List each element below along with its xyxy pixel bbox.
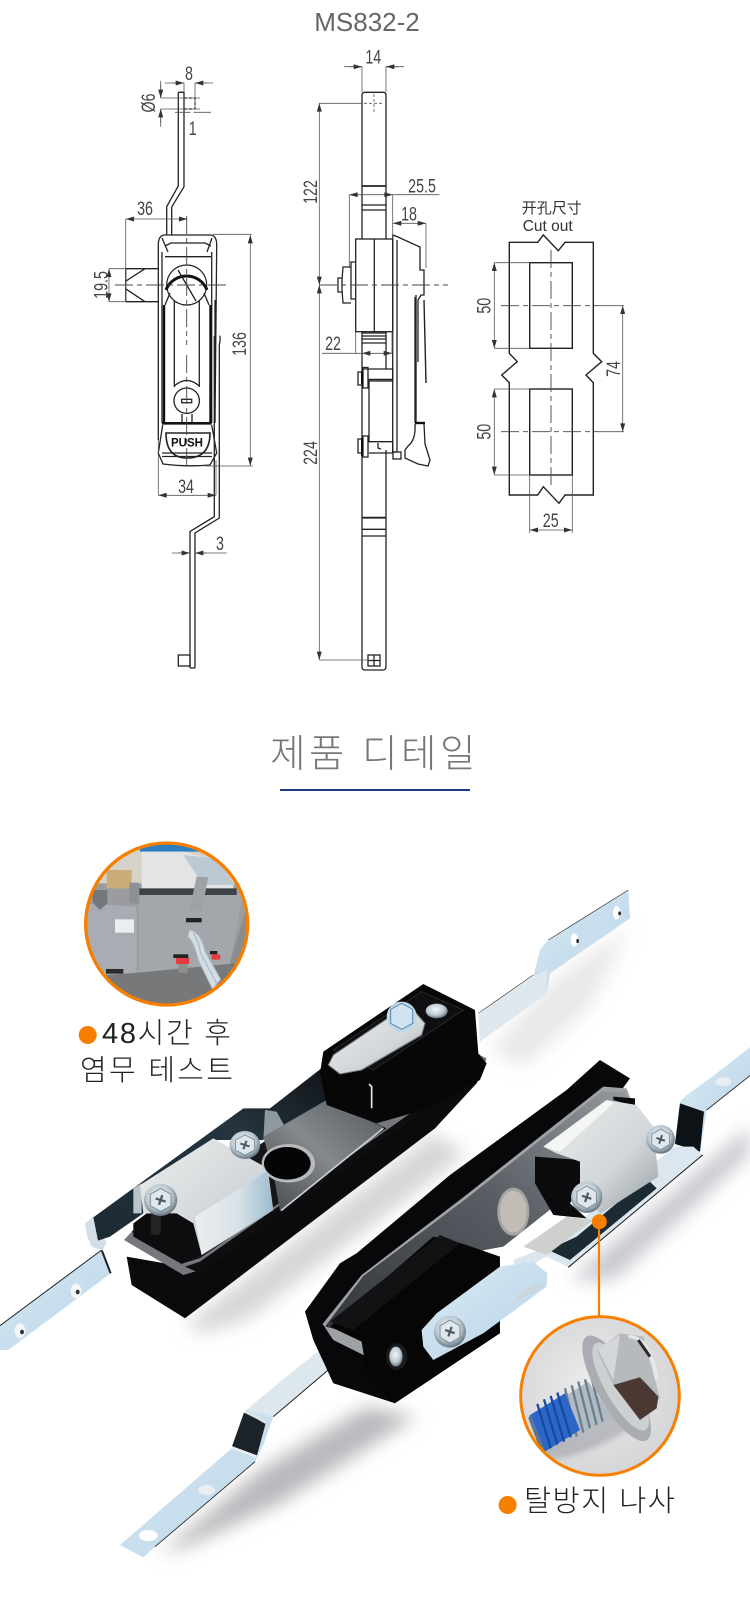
dimension values: Ø6 — [138, 94, 160, 112]
heading underline — [280, 789, 470, 791]
orange bullet — [499, 1496, 517, 1514]
dimension lines — [494, 263, 624, 533]
zoom circle: anti-loose screw — [521, 1317, 679, 1475]
thread — [568, 1382, 612, 1440]
callout dot — [592, 1214, 607, 1229]
dimension values: 136 — [229, 332, 251, 356]
product photo: right latch (front side) — [120, 1043, 750, 1557]
dimension values — [474, 298, 625, 532]
rod end tab — [184, 98, 195, 109]
dimension lines — [109, 81, 253, 553]
model title: MS832-2 — [314, 7, 420, 37]
technical drawing: cut out — [474, 200, 625, 533]
dimension values: 74 — [603, 361, 625, 377]
lock base — [305, 1060, 633, 1403]
caption: salt spray test: 48시간 후 — [102, 1018, 233, 1050]
lever screw — [387, 1002, 417, 1032]
back strip — [93, 1062, 340, 1241]
dimension values: 34 — [178, 476, 194, 498]
dimension values: 25.5 — [408, 176, 436, 197]
lower left strip — [120, 1335, 362, 1557]
lower left strip with holes — [0, 1217, 111, 1350]
technical drawing: front view — [91, 63, 253, 668]
dimension values: 122 — [300, 180, 322, 204]
handle knob circle — [167, 265, 207, 305]
handle profile — [393, 235, 430, 466]
cut out label: Cut out — [523, 218, 573, 235]
orange bullet — [79, 1026, 97, 1044]
key cylinder — [174, 388, 199, 413]
dark face — [613, 1377, 658, 1420]
lower square hole — [368, 655, 380, 666]
two cut out rectangles — [530, 263, 572, 475]
lever plate — [328, 1010, 425, 1074]
dimension values: 50 — [474, 424, 495, 440]
mounting bolts and bracket — [358, 368, 393, 457]
dimension values: 1 — [189, 118, 197, 140]
bracket screws — [144, 1184, 177, 1216]
dimension values: 224 — [300, 441, 322, 465]
lower latch rod — [190, 336, 220, 668]
cut out label: 开孔尺寸 — [522, 200, 582, 217]
side latch — [126, 269, 158, 302]
callout: connector from screw — [592, 1214, 607, 1316]
upper latch rod — [167, 92, 184, 235]
cut out label — [522, 200, 582, 235]
dimension values: 50 — [474, 298, 495, 314]
caption: anti-loose screw: 탈방지 나사 — [524, 1485, 676, 1518]
product photo: left latch (back side) — [0, 890, 630, 1350]
through hole — [262, 1144, 315, 1183]
dimension values: 8 — [185, 63, 193, 85]
upper handle box and strip — [320, 890, 630, 1123]
section heading: 제품 디테일 — [270, 733, 479, 776]
black box with lever — [330, 1235, 547, 1403]
caption: salt spray test — [79, 1018, 235, 1087]
lock body — [126, 235, 217, 466]
hex head — [596, 1333, 660, 1400]
dimension values: 36 — [137, 198, 153, 220]
caption: salt spray test: 염무 테스트 — [80, 1055, 235, 1087]
panel outline — [502, 235, 602, 503]
dimension values: 25 — [543, 510, 559, 532]
lock base — [124, 1053, 487, 1318]
technical drawing: side view — [300, 47, 448, 670]
salt spray photo circle — [83, 840, 250, 1013]
strike bar — [362, 92, 386, 670]
dimension values — [300, 47, 436, 465]
bracket screws — [571, 1182, 602, 1213]
bracket and rivet — [497, 1097, 675, 1255]
lock housing — [338, 239, 393, 332]
product photo: soft shadows — [160, 927, 750, 1553]
upper hole mark — [364, 94, 384, 114]
lock body: PUSH — [171, 438, 203, 450]
lever — [422, 1262, 547, 1360]
push button — [158, 425, 217, 466]
dimension values — [91, 63, 251, 555]
dimension values: 3 — [216, 533, 224, 555]
dimension values: 14 — [365, 47, 381, 68]
dimension lines — [319, 67, 439, 660]
mounting bracket — [133, 1131, 273, 1264]
dimension values: 18 — [401, 204, 417, 225]
flange — [582, 1336, 651, 1442]
dimension values: 22 — [325, 333, 341, 355]
dimension values: 19.5 — [91, 271, 112, 299]
right strip and lower frame — [513, 1043, 750, 1273]
